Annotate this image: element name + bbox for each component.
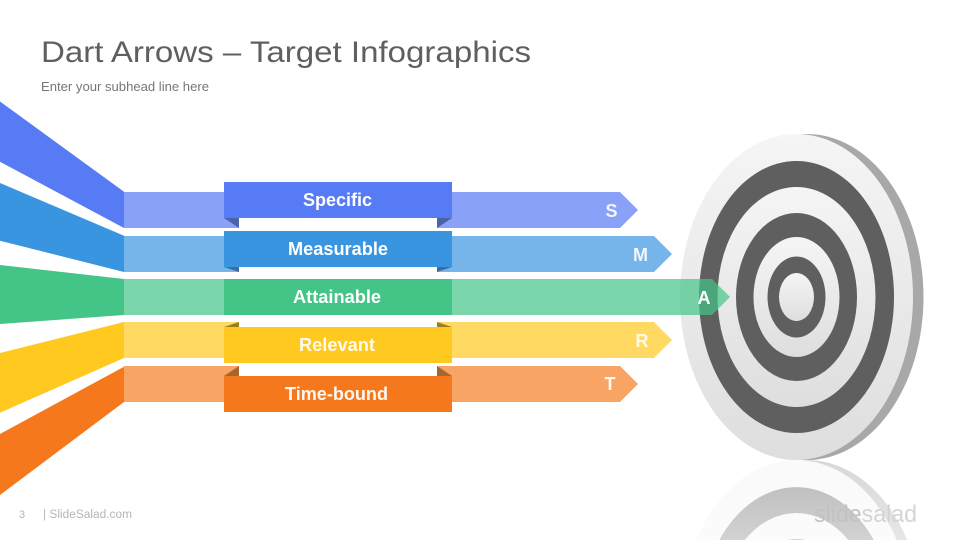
target face <box>680 134 913 460</box>
dart arrow: Measurable <box>0 183 672 272</box>
dart arrow: Relevant <box>0 322 672 413</box>
ribbon <box>224 279 452 315</box>
ribbon label: Measurable <box>288 239 388 259</box>
middle dark ring <box>736 213 857 381</box>
shaft right and head <box>437 192 638 228</box>
page number: 3 <box>19 509 25 521</box>
title: Dart Arrows – Target Infographics <box>41 36 531 69</box>
tail <box>0 367 124 495</box>
tail <box>0 183 124 272</box>
shaft left <box>124 236 239 272</box>
ribbon <box>224 327 452 363</box>
letter A: A <box>698 288 710 308</box>
tail <box>0 102 124 228</box>
ribbon folds <box>224 267 239 272</box>
shaft right and head <box>437 366 638 402</box>
target reflection <box>670 458 935 540</box>
bullseye <box>779 273 814 321</box>
footer site: | SlideSalad.com <box>43 509 132 521</box>
dart arrow: Time-bound <box>0 366 638 495</box>
ribbon label: Attainable <box>293 287 381 307</box>
letter T: T <box>604 374 616 394</box>
ribbon folds <box>224 322 239 327</box>
watermark logo: slidesalad <box>814 501 917 528</box>
inner dark ring <box>768 256 826 338</box>
ribbon folds <box>224 366 239 376</box>
outer light ring <box>718 187 876 407</box>
tail <box>0 322 124 413</box>
shaft and head <box>124 279 730 315</box>
ribbon label: Relevant <box>299 335 375 355</box>
middle light ring <box>754 237 840 357</box>
ribbon <box>224 376 452 412</box>
letter R: R <box>636 331 648 351</box>
ribbon <box>224 231 452 267</box>
letter S: S <box>605 201 618 221</box>
shaft left <box>124 322 239 358</box>
ribbon <box>224 182 452 218</box>
dart arrow: Attainable <box>0 265 730 324</box>
target board <box>680 134 924 460</box>
dart arrow: Specific <box>0 102 638 228</box>
subhead: Enter your subhead line here <box>41 80 209 94</box>
ribbon label: Specific <box>303 190 372 210</box>
shaft left <box>124 366 239 402</box>
letter M: M <box>633 245 648 265</box>
tail <box>0 265 124 324</box>
shaft right and head <box>437 236 672 272</box>
outer dark ring <box>699 161 894 433</box>
ribbon folds <box>224 218 239 228</box>
target side edge <box>690 134 924 460</box>
ribbon label: Time-bound <box>285 384 388 404</box>
shaft left <box>124 192 239 228</box>
shaft right and head <box>437 322 672 358</box>
